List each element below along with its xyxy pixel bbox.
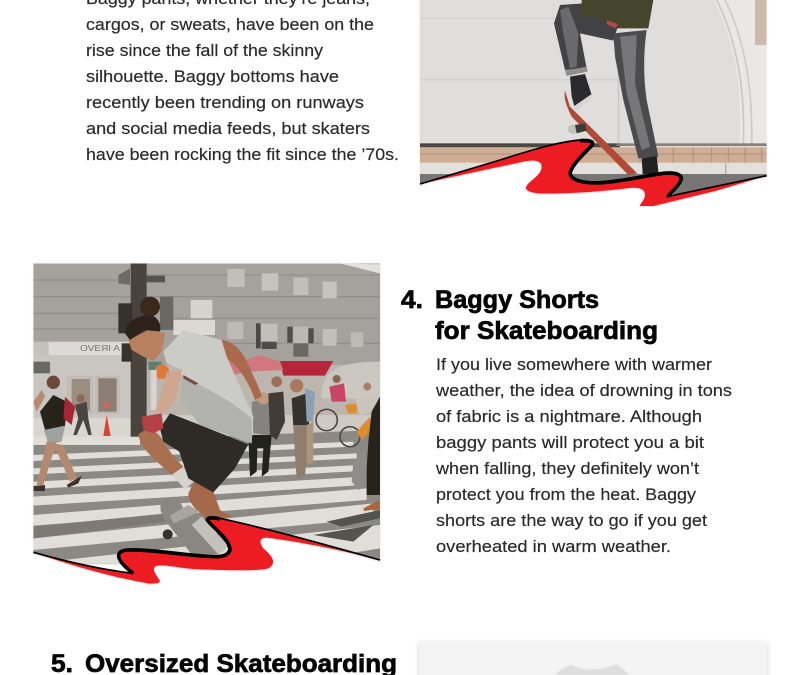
text block: baggy shorts description: overheated in warm weather. [436,537,671,556]
shadows on road [313,510,380,542]
shoes [570,74,592,108]
jacket [582,0,653,28]
red wave [33,517,380,584]
text block: baggy shorts description: when falling, they definitely won’t [435,459,699,478]
background right street [146,365,379,416]
text block: baggy shorts description: protect you from the heat. Baggy [436,485,697,504]
board and shoes [160,498,228,554]
text block: baggy shorts description: of fabric is a nightmare. Although [436,407,702,426]
pedestrians right group [252,400,270,434]
text block: baggy pants description: rise since the fall of the skinny [86,41,324,60]
text block: baggy shorts description [435,355,732,556]
traffic pole [131,263,147,437]
text block: baggy shorts description: weather, the idea of drowning in tons [435,381,732,400]
photo: skater in baggy jeans with red wave [420,0,767,206]
bent leg jeans [554,3,620,70]
pedestrian left [40,395,67,430]
back arm [220,340,262,400]
straight leg jeans [613,30,658,158]
text block: baggy shorts description: shorts are the way to go if you get [436,511,707,530]
text block: baggy pants description: cargos, or sweats, have been on the [86,15,374,34]
photo: skater in baggy shorts at crosswalk with red wave [33,263,380,584]
heading: 4. Baggy Shorts for Skateboarding: 4. [401,286,423,314]
shorts [160,413,248,492]
text block: baggy shorts description: baggy pants will protect you a bit [436,433,704,452]
heading: 4. Baggy Shorts for Skateboarding: for Skateboarding [435,317,658,345]
traffic cone [103,415,111,436]
photo: oversized t-shirt top edge [419,641,767,675]
building [33,263,380,367]
pedestrian small [73,402,92,435]
road [33,430,380,563]
photo: skater in baggy shorts at crosswalk with red wave: OVEЯI A [80,344,121,353]
front arm [155,370,182,413]
text block: baggy pants description: and social media feeds, but skaters [86,119,370,138]
lower legs behind shorts [138,430,185,477]
text block: baggy pants description: recently been trending on runways [86,93,364,112]
text block: baggy pants description: silhouette. Baggy bottoms have [86,67,339,86]
heading: 4. Baggy Shorts for Skateboarding [401,286,658,345]
cuff [565,67,588,76]
shop front [33,355,133,418]
heading: 4. Baggy Shorts for Skateboarding: Baggy Shorts [435,286,599,314]
main skater [123,297,262,554]
text block: baggy pants description [86,0,399,164]
skateboard [565,91,637,175]
text block: baggy pants description: have been rocking the fit since the ’70s. [86,145,399,164]
red wave [420,140,767,206]
shirt [163,330,253,443]
pedestrian right edge [367,397,380,495]
cyclists [329,383,346,402]
text block: baggy shorts description: If you live somewhere with warmer [436,355,712,374]
head [128,330,165,361]
